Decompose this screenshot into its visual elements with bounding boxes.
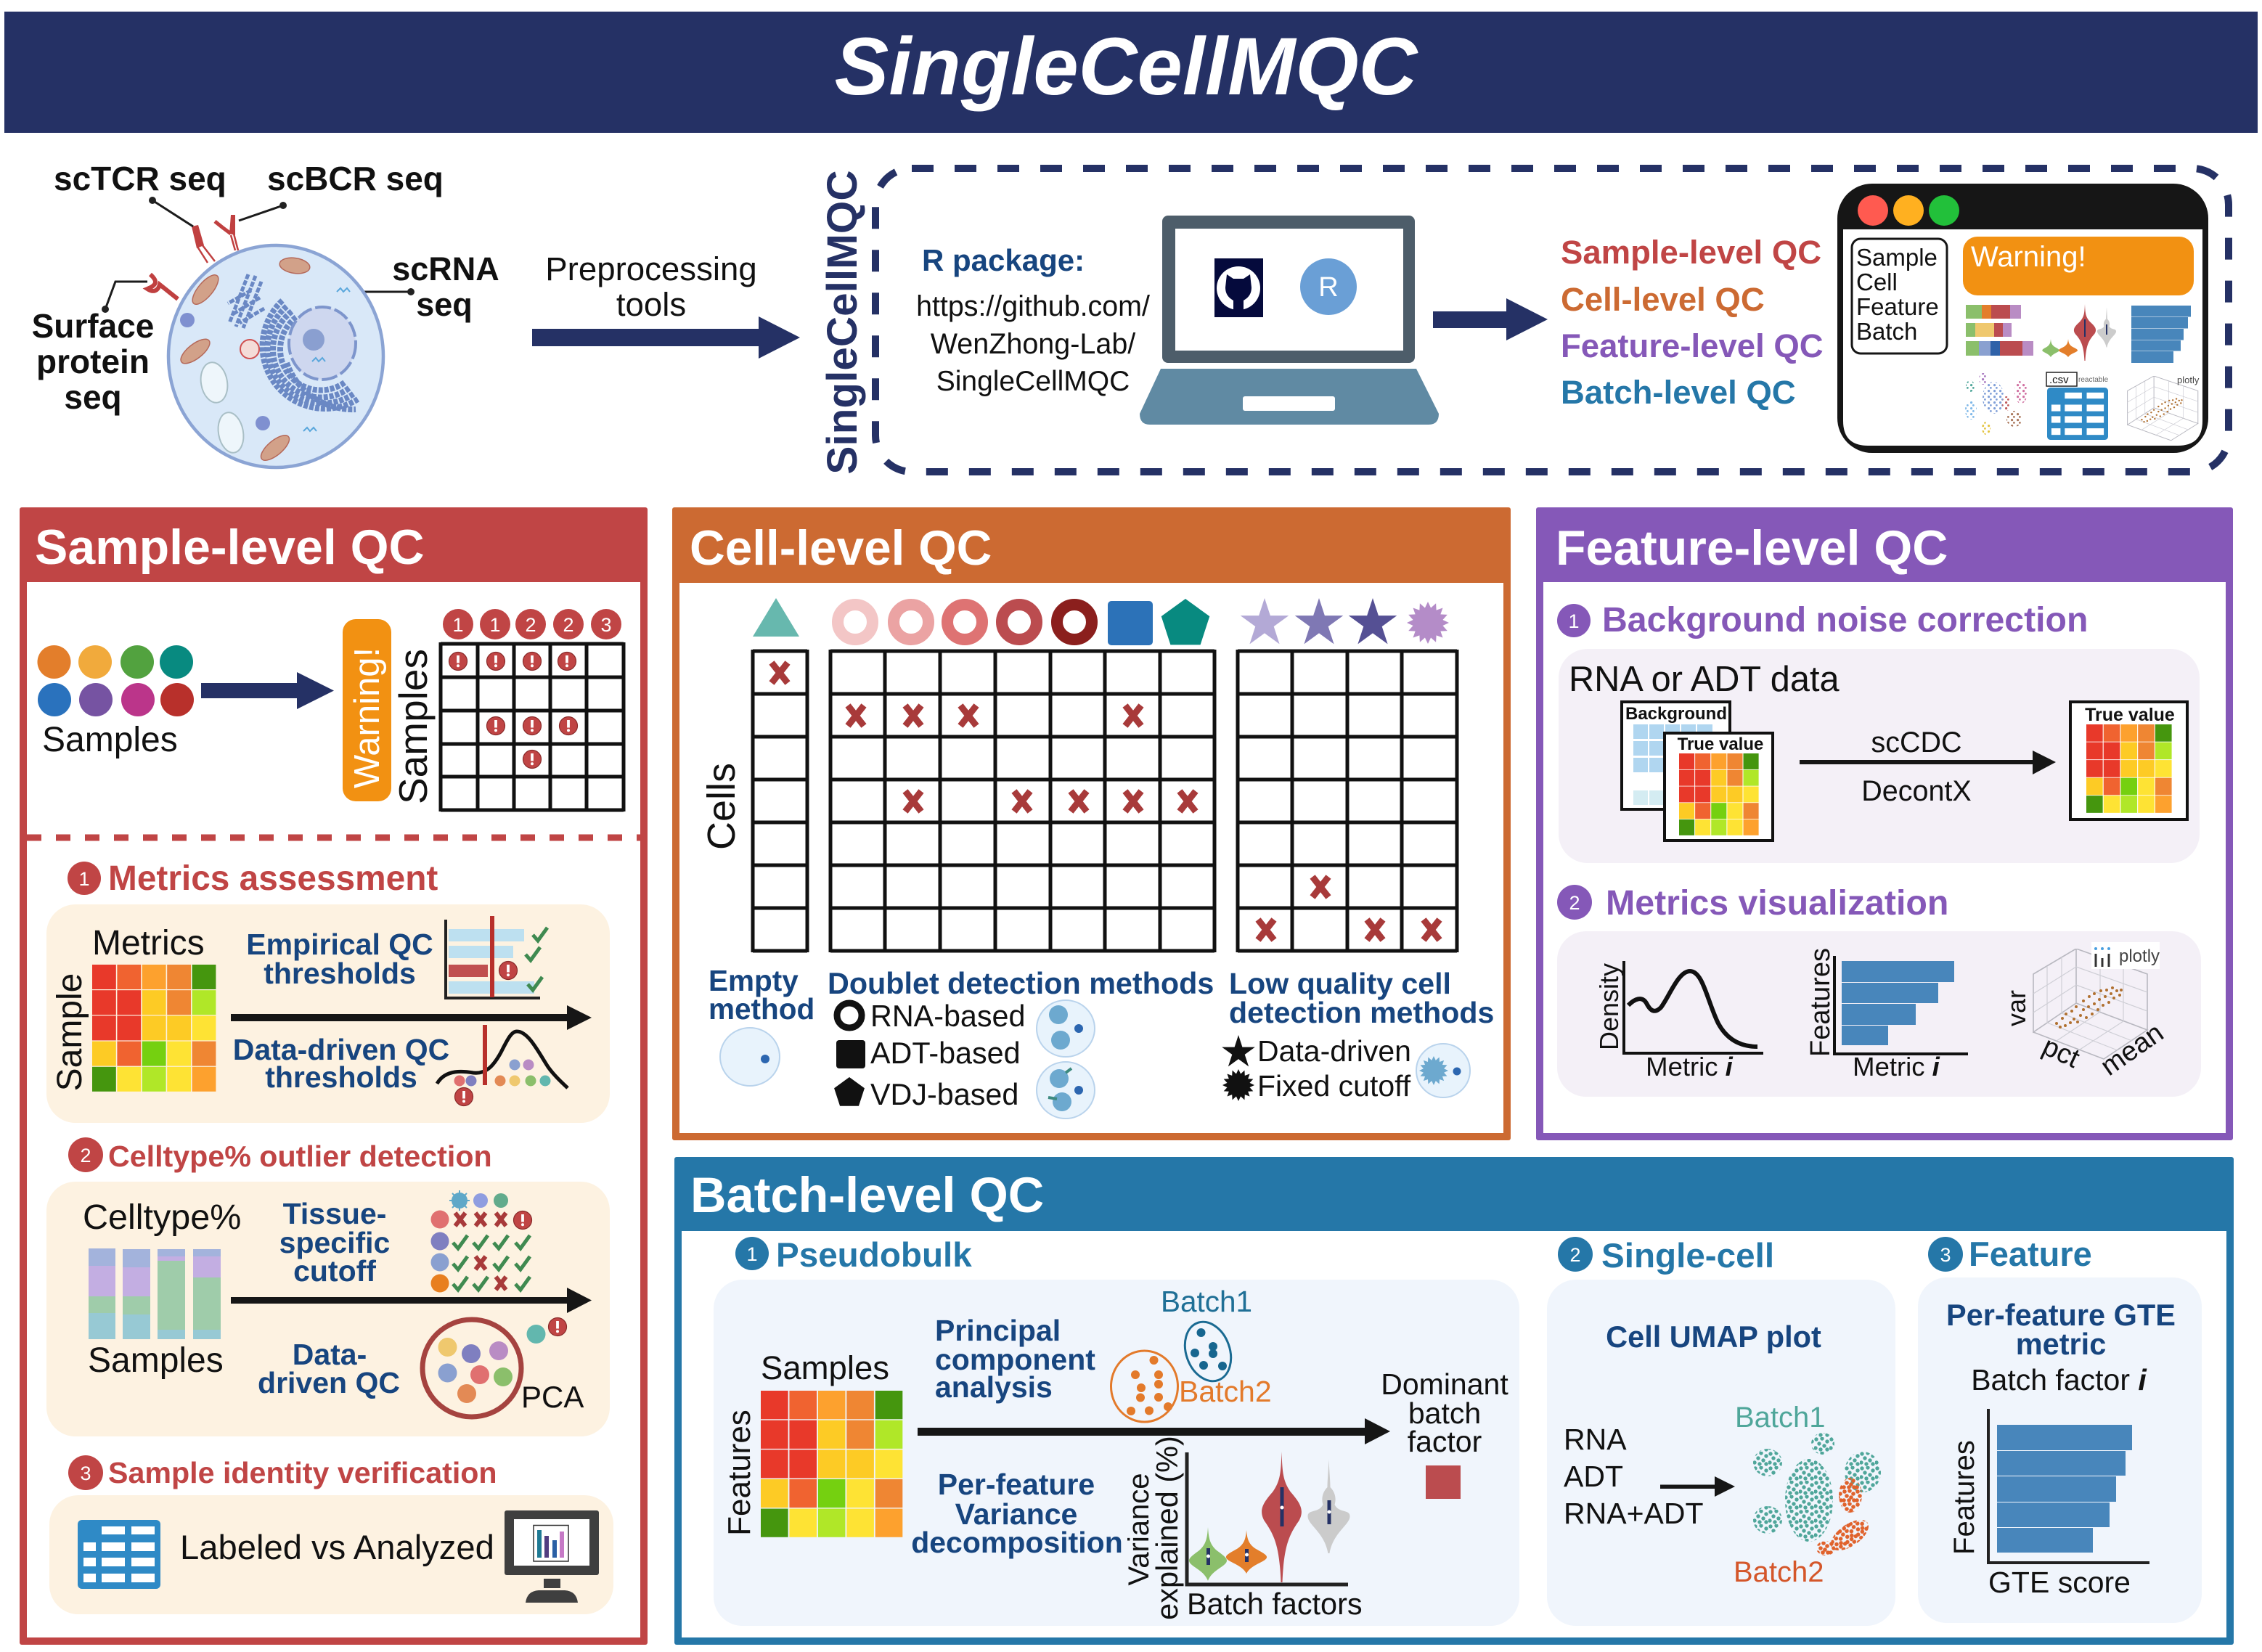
tissue specific cutoff text: Tissue- (283, 1197, 386, 1230)
density curve with threshold (437, 1025, 568, 1106)
box: background correction: RNA or ADT data (1569, 660, 1840, 699)
section heading: Celltype% outlier detection: Celltype% outlier detection (108, 1140, 492, 1173)
corrected matrix: True value (2085, 705, 2175, 725)
legend: low quality method types: Fixed cutoff (1257, 1069, 1411, 1103)
sidebar: Batch (1856, 318, 1917, 345)
section heading: Metrics assessment: 1 (78, 868, 90, 890)
section heading: Background noise correction: 1 (1568, 610, 1580, 632)
warning grid: 1 (489, 614, 501, 636)
box: metrics assessment: Sample (51, 973, 89, 1091)
arrow (201, 672, 334, 709)
tissue specific cutoff text: cutoff (293, 1254, 376, 1288)
illustration: cell with sequencing modalities (102, 197, 415, 467)
flagged cells (772, 663, 1440, 940)
box: pseudobulk (714, 1280, 1519, 1626)
UMAP clusters (1734, 1402, 1881, 1588)
vesicles (180, 288, 350, 455)
mini table: reactable (2078, 376, 2109, 384)
bar plot: Metric i (1853, 1052, 1940, 1081)
legend: low quality method types (1222, 1034, 1411, 1103)
warning grid: 2 (525, 614, 536, 636)
density plot (1594, 961, 1763, 1081)
red square (1426, 1465, 1461, 1499)
panel: Feature-level QC (1536, 507, 2233, 1140)
heading: Feature-level QC (1556, 520, 1948, 576)
box: metrics assessment (46, 904, 610, 1123)
label: scTCR seq: scTCR seq (54, 160, 226, 197)
box: single-cell: ADT (1564, 1460, 1623, 1493)
3D scatter plot (2001, 942, 2169, 1082)
PCA circle: PCA (521, 1380, 584, 1414)
box: single-cell: RNA (1564, 1423, 1627, 1456)
box: pseudobulk: Samples (761, 1349, 889, 1386)
3D scatter plot: plotly (2119, 946, 2160, 966)
stacked bars (89, 1248, 221, 1339)
QC level list: Sample-level QC (1561, 234, 1821, 271)
data driven thresholds text: thresholds (265, 1060, 417, 1094)
legend: low quality method types: Data-driven (1257, 1034, 1411, 1068)
arrow (231, 1005, 592, 1030)
mini violins (2042, 304, 2116, 361)
browser window mockup (1837, 184, 2208, 453)
method labels and arrow (1800, 727, 2056, 807)
label: scBCR seq: scBCR seq (267, 160, 444, 197)
data driven QC text: driven QC (258, 1366, 400, 1399)
box: feature: Batch factor i (1971, 1363, 2147, 1397)
arrow: laptop to QC list (1433, 298, 1548, 340)
grid: low quality methods (1238, 650, 1457, 952)
cell body (168, 245, 383, 467)
sidebar (1852, 239, 1947, 353)
box: single-cell (1547, 1280, 1895, 1626)
legend: doublet method types: VDJ-based (870, 1078, 1018, 1111)
box: feature: metric (2016, 1327, 2106, 1361)
section heading: Single-cell: Single-cell (1601, 1237, 1774, 1275)
text: R package URL: https://github.com/ (916, 290, 1150, 322)
GTE bar chart (1948, 1409, 2149, 1599)
density plot: Density (1594, 963, 1624, 1050)
icon: doublet droplets (1037, 1000, 1095, 1119)
text: variance decomposition: Per-feature (938, 1468, 1095, 1501)
text: dominant batch factor: factor (1408, 1425, 1482, 1458)
box: single-cell: Cell UMAP plot (1606, 1320, 1821, 1354)
mini umap (1960, 370, 2036, 437)
text: principal component analysis: analysis (935, 1370, 1053, 1404)
warning grid: 1 (452, 614, 464, 636)
UMAP clusters: Batch1 (1735, 1402, 1826, 1434)
section heading: Background noise correction: Background noise correction (1602, 600, 2088, 639)
text: Low quality cell detection methods: Low quality cell (1229, 967, 1451, 1000)
method labels and arrow: DecontX (1861, 775, 1972, 807)
density plot: Metric i (1646, 1052, 1734, 1081)
vertical warning (343, 619, 391, 801)
heading: Batch-level QC (690, 1167, 1044, 1223)
grid: empty method (753, 650, 807, 952)
threshold bar chart (446, 916, 547, 998)
data driven thresholds text: Data-driven QC (233, 1033, 449, 1066)
QC level list: Cell-level QC (1561, 281, 1765, 318)
arrow: to package (532, 316, 800, 359)
section heading: Celltype% outlier detection: 2 (80, 1145, 91, 1166)
3D scatter plot: mean (2095, 1018, 2169, 1082)
QC level list (1561, 234, 1824, 411)
section heading: Pseudobulk: 1 (746, 1243, 758, 1265)
icon: R (1300, 258, 1357, 315)
bar plot (1805, 948, 1968, 1081)
dashed package frame (875, 168, 2229, 472)
text: dominant batch factor: Dominant (1381, 1367, 1508, 1401)
sample dots (38, 645, 194, 759)
nucleus (289, 307, 356, 380)
box: celltype outlier: Celltype% (83, 1198, 241, 1237)
arrow (1660, 1476, 1735, 1497)
arrow (231, 1288, 592, 1313)
golgi (228, 274, 264, 328)
section heading: Metrics visualization: Metrics visualization (1606, 883, 1948, 923)
box: feature: Per-feature GTE (1946, 1298, 2176, 1332)
heading: Cell-level QC (690, 521, 992, 576)
icon: GitHub (1214, 258, 1263, 317)
panel: Batch-level QC (674, 1157, 2234, 1645)
method labels and arrow: scCDC (1871, 727, 1962, 758)
label: Preprocessing tools: Preprocessing (545, 250, 757, 287)
mini table (2046, 372, 2109, 440)
arrow (918, 1418, 1390, 1444)
UMAP clusters: Batch2 (1734, 1556, 1824, 1588)
violin plot: Variance (1123, 1473, 1155, 1585)
section heading: Metrics assessment: Metrics assessment (108, 859, 438, 898)
data driven QC text: Data- (293, 1338, 367, 1371)
box: celltype outlier (46, 1182, 610, 1436)
legend: doublet method types: ADT-based (870, 1036, 1021, 1070)
violin plot (1123, 1436, 1363, 1621)
mini 3D plot: plotly (2177, 375, 2200, 385)
section heading: Metrics visualization: 2 (1569, 892, 1580, 914)
icon: empty droplet (720, 1028, 780, 1086)
PCA batches: Batch2 (1179, 1375, 1272, 1408)
box: feature (1918, 1277, 2202, 1623)
text: Low quality cell detection methods: detection methods (1229, 996, 1494, 1029)
sidebar: Cell (1856, 269, 1898, 295)
box: pseudobulk: Features (722, 1410, 757, 1536)
dashed divider (27, 835, 640, 841)
warning banner: Warning! (1971, 241, 2086, 273)
section heading: Pseudobulk: Pseudobulk (776, 1236, 972, 1275)
true value matrix (1665, 733, 1773, 841)
text: R package URL: WenZhong-Lab/ (931, 328, 1135, 360)
warning banner (1963, 237, 2194, 295)
mini bars (2131, 306, 2191, 363)
mini table: .csv (2049, 374, 2069, 386)
label: scRNA seq: seq (416, 286, 473, 323)
sample dots: Samples (42, 721, 178, 759)
text: variance decomposition: decomposition (911, 1526, 1123, 1559)
label: Preprocessing tools: tools (616, 286, 686, 323)
title banner (4, 12, 2258, 133)
warning grid (441, 609, 624, 811)
icon: R: R (1318, 272, 1339, 303)
sidebar: Sample (1856, 244, 1938, 271)
label: Surface protein seq: protein (36, 343, 150, 380)
section heading: Feature: Feature (1969, 1235, 2092, 1273)
receptors and leader lines (102, 197, 415, 313)
sidebar: Feature (1856, 293, 1939, 320)
mini stacked bars (1966, 305, 2033, 356)
cutoff matrix (431, 1190, 531, 1292)
empirical thresholds text: Empirical QC (246, 928, 433, 961)
text: principal component analysis: component (935, 1343, 1095, 1376)
PCA circle (422, 1318, 584, 1417)
text: Empty method: method (709, 992, 814, 1026)
section heading: Sample identity verification: 3 (80, 1463, 91, 1484)
box: metrics assessment: Metrics (92, 924, 205, 962)
mitochondria (177, 256, 311, 465)
box: labeled vs analyzed (49, 1495, 613, 1614)
box: labeled vs analyzed: Labeled vs Analyzed (180, 1529, 494, 1567)
box: metrics visualization (1557, 931, 2201, 1097)
GTE bar chart: GTE score (1988, 1566, 2131, 1599)
label: Surface protein seq: seq (64, 378, 122, 416)
text: R package URL: SingleCellMQC (936, 366, 1130, 397)
icon: laptop (1140, 216, 1439, 425)
box: single-cell: RNA+ADT (1564, 1497, 1704, 1530)
panel: Sample-level QC (20, 507, 648, 1645)
background matrix (1622, 702, 1730, 809)
endoplasmic reticulum (263, 300, 358, 409)
QC level list: Batch-level QC (1561, 374, 1796, 411)
label: Cells: Cells (700, 763, 743, 850)
text: Doublet detection methods: Doublet detection methods (828, 967, 1214, 1000)
section heading: Feature: 3 (1940, 1244, 1951, 1266)
text: variance decomposition: Variance (955, 1497, 1077, 1531)
violin plot: explained (%) (1150, 1436, 1184, 1620)
mini 3D plot (2128, 375, 2200, 441)
text: R package URL: R package: (922, 243, 1085, 277)
warning grid: 2 (563, 614, 574, 636)
grid: doublet methods (830, 650, 1214, 952)
text: dominant batch factor: batch (1408, 1397, 1481, 1430)
vertical label: SingleCellMQC: SingleCellMQC (819, 170, 866, 475)
background matrix: Background (1625, 704, 1727, 724)
true value matrix: True value (1678, 735, 1763, 754)
text: R package URL (916, 243, 1150, 397)
box: background correction (1559, 649, 2200, 863)
tissue specific cutoff text: specific (279, 1226, 390, 1259)
PCA batches: Batch1 (1161, 1285, 1252, 1318)
violin plot: Batch factors (1187, 1587, 1363, 1621)
warning grid: 3 (600, 614, 612, 636)
method shapes (753, 598, 1449, 645)
icon: monitor (505, 1510, 599, 1603)
PCA batches (1111, 1285, 1272, 1422)
panel: Cell-level QC (672, 507, 1511, 1140)
bar plot: Features (1805, 948, 1836, 1057)
legend: doublet method types (834, 999, 1025, 1111)
section heading: Single-cell: 2 (1569, 1244, 1581, 1266)
QC level list: Feature-level QC (1561, 327, 1824, 364)
GTE bar chart: Features (1948, 1440, 1980, 1555)
3D scatter plot: pct (2038, 1031, 2084, 1074)
title banner: SingleCellMQC (835, 21, 1418, 112)
icon: low quality droplet (1416, 1044, 1470, 1097)
3D scatter plot: var (2001, 990, 2031, 1026)
box: celltype outlier: Samples (88, 1341, 224, 1380)
text: Empty method: Empty (709, 964, 799, 997)
vertical warning: Warning! (348, 647, 387, 788)
corrected matrix (2070, 702, 2187, 819)
legend: doublet method types: RNA-based (870, 999, 1025, 1033)
empirical thresholds text: thresholds (264, 957, 416, 990)
axis label samples: Samples (391, 649, 436, 804)
label: Surface protein seq: Surface (32, 307, 154, 345)
heading: Sample-level QC (35, 520, 425, 575)
text: principal component analysis: Principal (935, 1314, 1061, 1347)
section heading: Sample identity verification: Sample identity verification (108, 1456, 497, 1489)
label: scRNA seq: scRNA (392, 250, 499, 287)
